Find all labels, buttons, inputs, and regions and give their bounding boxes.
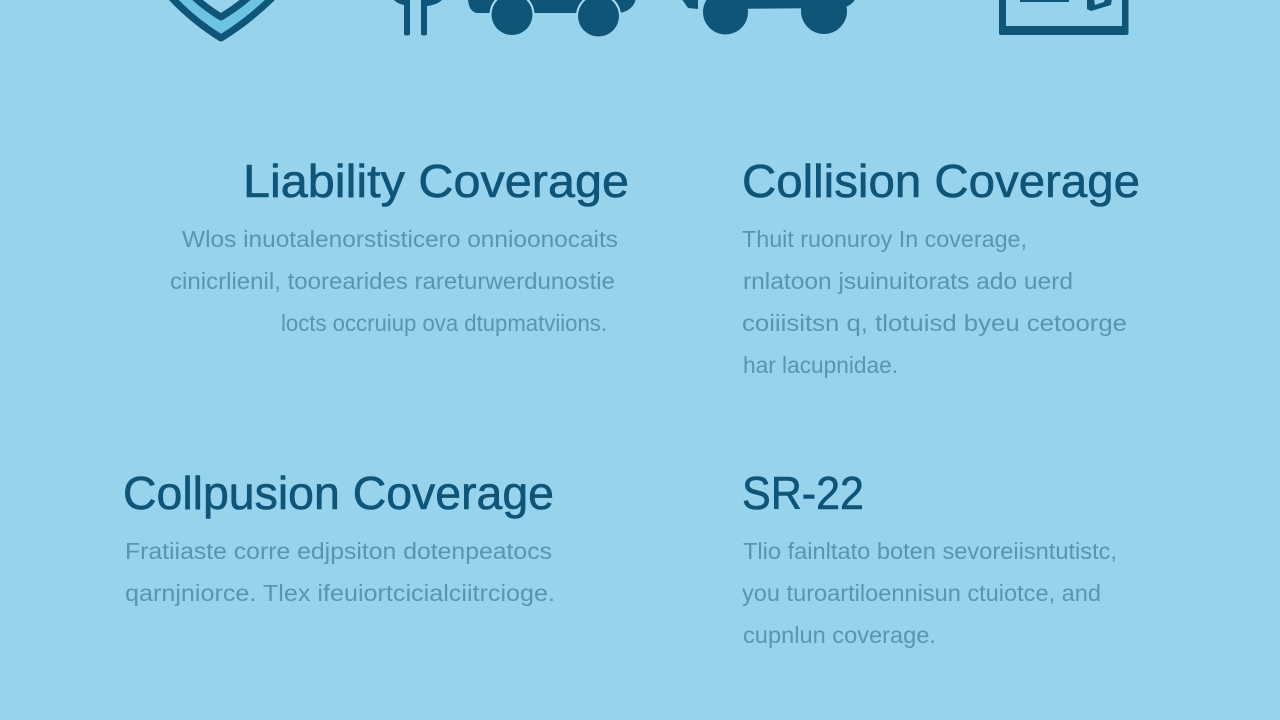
panel: liability coverage [170, 155, 629, 336]
text block: collision description [742, 226, 1127, 378]
text block: liability description [170, 226, 618, 336]
text block: collision description: har lacupnidae. [743, 352, 898, 378]
icon: branching post [392, 0, 444, 36]
text block: SR-22 description [742, 538, 1117, 648]
icon: shield [170, 0, 274, 38]
icon: first car [468, 0, 636, 38]
text block: collpusion description [125, 538, 555, 606]
text block: SR-22 description: you turoartiloennisun ctuiotce, and [742, 580, 1101, 606]
panel: collision coverage [742, 155, 1140, 378]
text block: liability description: Wlos inuotalenorstisticero onnioonocaits [182, 226, 618, 252]
text block: collision description: coiiisitsn q, tlotuisd byeu cetoorge [742, 310, 1127, 336]
text block: SR-22 description: Tlio fainltato boten sevoreiisntutistc, [743, 538, 1117, 564]
heading: liability coverage: Liability Coverage [243, 155, 629, 207]
text block: collpusion description: qarnjniorce. Tlex ifeuiortcicialciitrcioge. [125, 580, 555, 606]
heading: collpusion coverage: Collpusion Coverage [123, 467, 554, 519]
text block: liability description: cinicrlienil, toorearides rareturwerdunostie [170, 268, 615, 294]
icon: document [999, 0, 1128, 35]
text block: collision description: Thuit ruonuroy In coverage, [742, 226, 1027, 252]
panel: SR-22 [742, 467, 1117, 648]
text block: SR-22 description: cupnlun coverage. [743, 622, 936, 648]
heading: SR-22: SR-22 [742, 467, 864, 519]
icon: second car [681, 0, 856, 34]
text block: collpusion description: Fratiiaste corre edjpsiton dotenpeatocs [125, 538, 552, 564]
heading: collision coverage: Collision Coverage [742, 155, 1140, 207]
panel: collpusion coverage [123, 467, 555, 606]
text block: liability description: locts occruiup ova dtupmatviions. [281, 310, 607, 336]
text block: collision description: rnlatoon jsuinuitorats ado uerd [743, 268, 1073, 294]
